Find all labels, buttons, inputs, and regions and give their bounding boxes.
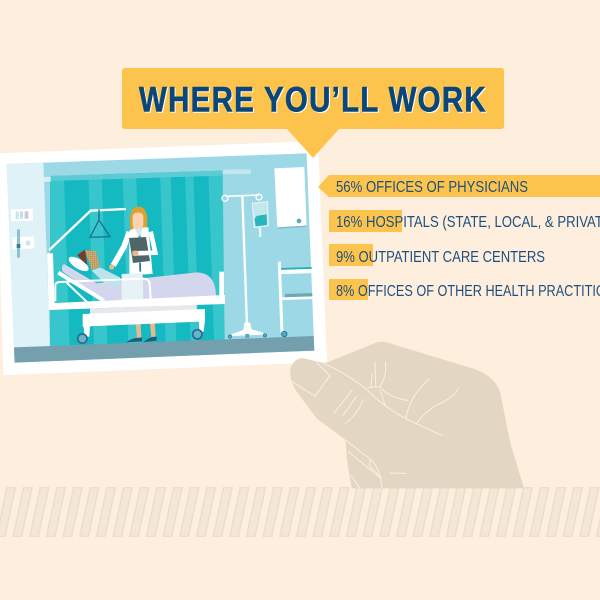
bed frame [78,305,205,343]
floor [14,336,314,363]
stat: offices of physicians [318,175,600,197]
title text: WHERE YOU’LL WORK [139,80,487,120]
bed rails and base [48,253,225,310]
mattress [62,264,216,301]
photo card with hospital scene [0,141,327,375]
bed trapeze [49,209,126,250]
icon: hand holding photo [290,342,524,488]
stat: offices of physicians: 56% OFFICES OF PHYSICIANS [336,179,528,196]
cabinet [274,167,307,229]
banner shape with pointer [122,68,504,158]
shelving cart [279,262,313,337]
photo white border [0,141,327,375]
doctor coat over bed rail [122,273,143,300]
doctor [109,207,155,275]
striped ground band [0,487,600,537]
room wall [7,153,314,363]
wall outlet panels [11,209,34,258]
curtain [43,171,225,347]
curtain rail [223,169,251,174]
stat: outpatient care centers: 9% OUTPATIENT CARE CENTERS [336,249,545,266]
patient [77,249,120,288]
pillow [67,254,91,274]
IV pole and bag [222,194,268,338]
stat: outpatient care centers [329,244,545,266]
title banner [122,68,504,158]
doctor legs and shoes [127,320,157,342]
left wall panel [7,163,50,348]
